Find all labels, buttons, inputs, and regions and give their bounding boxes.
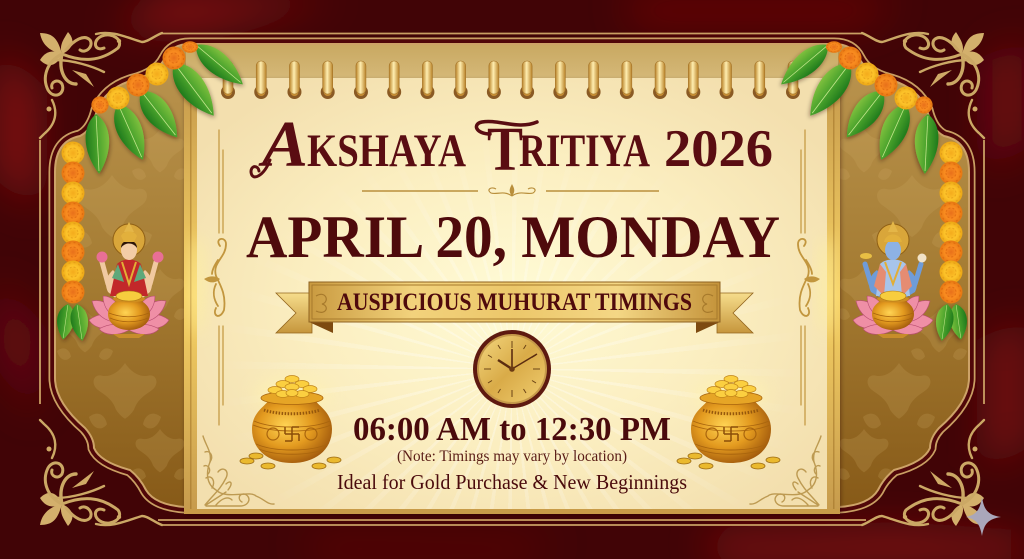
icon: Lakshmi on lotus bbox=[89, 222, 169, 338]
ribbon right tail bbox=[717, 293, 753, 333]
icon: Vishnu on lotus bbox=[853, 221, 933, 338]
timing text: 06:00 AM to 12:30 PM bbox=[353, 411, 671, 448]
calendar page bbox=[184, 45, 840, 514]
title: T bbox=[487, 116, 523, 184]
clock bbox=[473, 330, 551, 408]
purpose text: Ideal for Gold Purchase & New Beginnings bbox=[337, 470, 687, 494]
gold frame strips bbox=[184, 78, 840, 514]
garland and mango leaves right bbox=[774, 36, 970, 342]
title: KSHAYA bbox=[307, 125, 466, 177]
glow on frame bbox=[191, 235, 205, 335]
paper corner flourishes bbox=[203, 436, 821, 506]
title: 2026 bbox=[664, 120, 773, 178]
paper side flourishes bbox=[204, 130, 820, 425]
garland and mango leaves left bbox=[54, 36, 250, 342]
title: A bbox=[258, 108, 308, 181]
sparkle watermark bbox=[966, 497, 1001, 536]
spiral binding rings bbox=[221, 61, 800, 99]
note text: (Note: Timings may vary by location) bbox=[397, 448, 627, 465]
paper bbox=[197, 78, 827, 509]
title: RITIYA bbox=[519, 125, 650, 177]
right pot of coins bbox=[677, 376, 780, 469]
top binding band bbox=[186, 45, 838, 79]
ornate scalloped gold panel bbox=[55, 44, 969, 507]
left pot of coins bbox=[240, 376, 341, 469]
sun rays bbox=[307, 222, 717, 509]
title divider bbox=[362, 184, 659, 196]
ribbon left tail bbox=[276, 293, 312, 333]
ribbon banner bbox=[276, 282, 753, 333]
banner text: AUSPICIOUS MUHURAT TIMINGS bbox=[337, 289, 692, 316]
title bbox=[251, 108, 773, 184]
date heading: APRIL 20, MONDAY bbox=[246, 204, 780, 270]
